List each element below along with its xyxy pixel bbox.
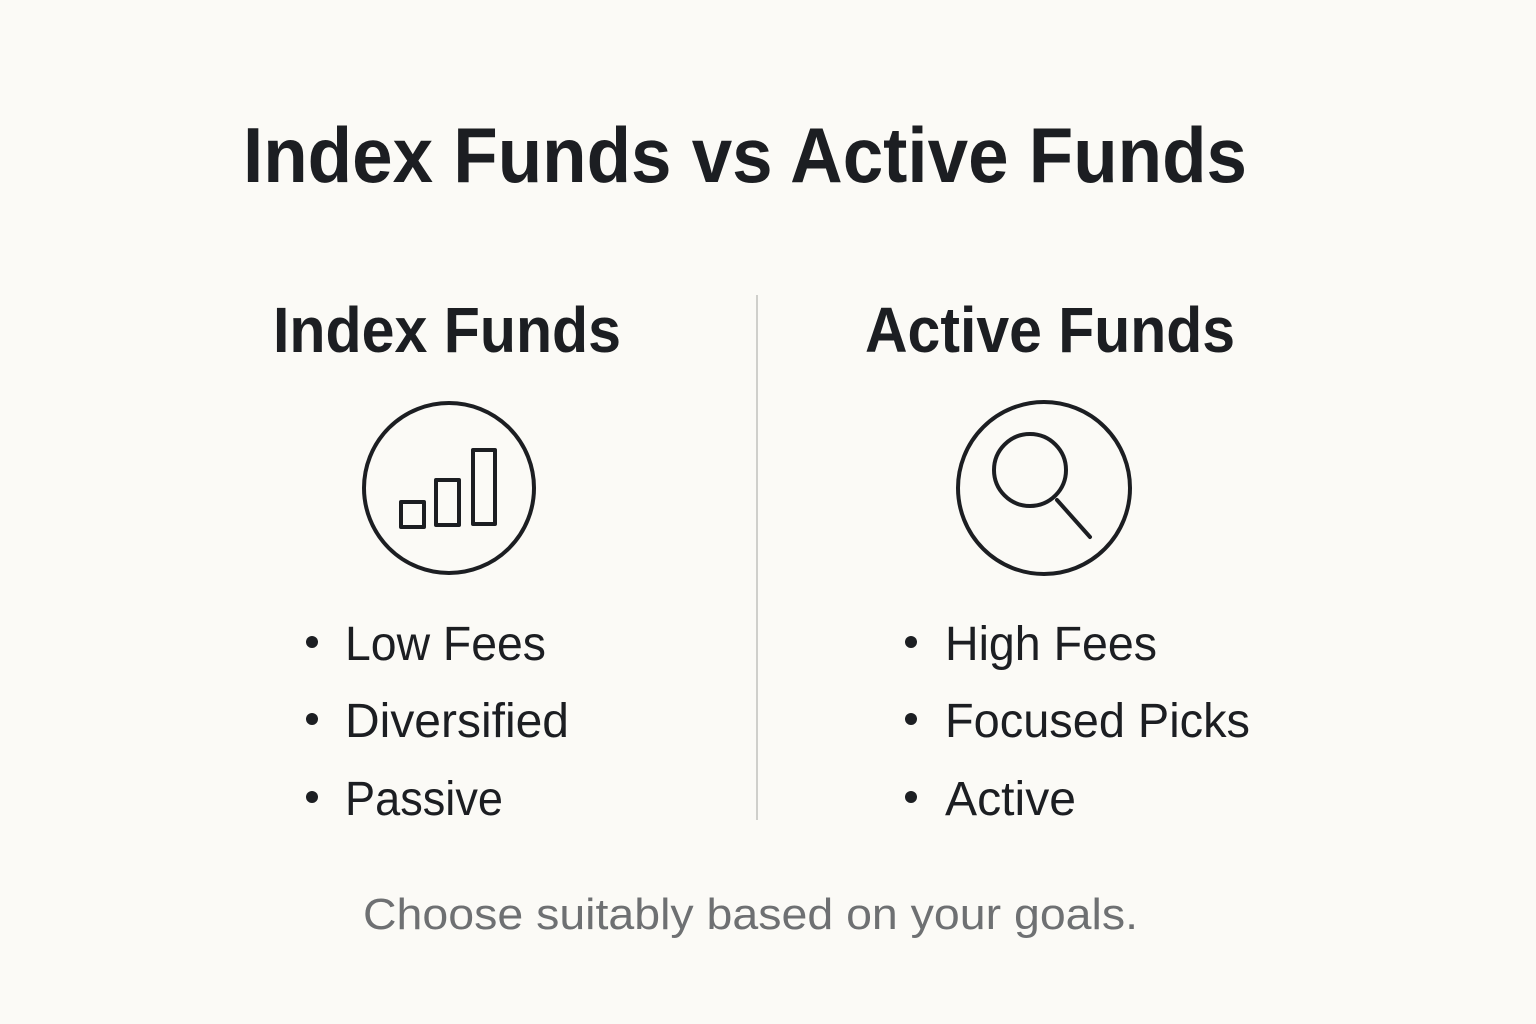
- list: active features: Active: [945, 773, 1076, 826]
- list: index features: Passive: [345, 773, 503, 826]
- list: active features: High Fees: [945, 618, 1157, 671]
- list: index features: [306, 618, 569, 826]
- list: index features: Low Fees: [345, 618, 546, 671]
- icon: bar chart: [364, 403, 534, 573]
- title: Index Funds vs Active Funds: [243, 111, 1247, 199]
- list: active features: [905, 618, 1250, 826]
- footer note: Choose suitably based on your goals.: [363, 890, 1138, 939]
- list: active features: Focused Picks: [945, 695, 1250, 748]
- list: index features: Diversified: [345, 695, 569, 748]
- panel: index funds: [273, 294, 621, 826]
- icon: magnifier: [958, 402, 1130, 574]
- panel: active funds: [865, 294, 1250, 826]
- heading: index funds: Index Funds: [273, 294, 621, 366]
- heading: active funds: Active Funds: [865, 294, 1235, 366]
